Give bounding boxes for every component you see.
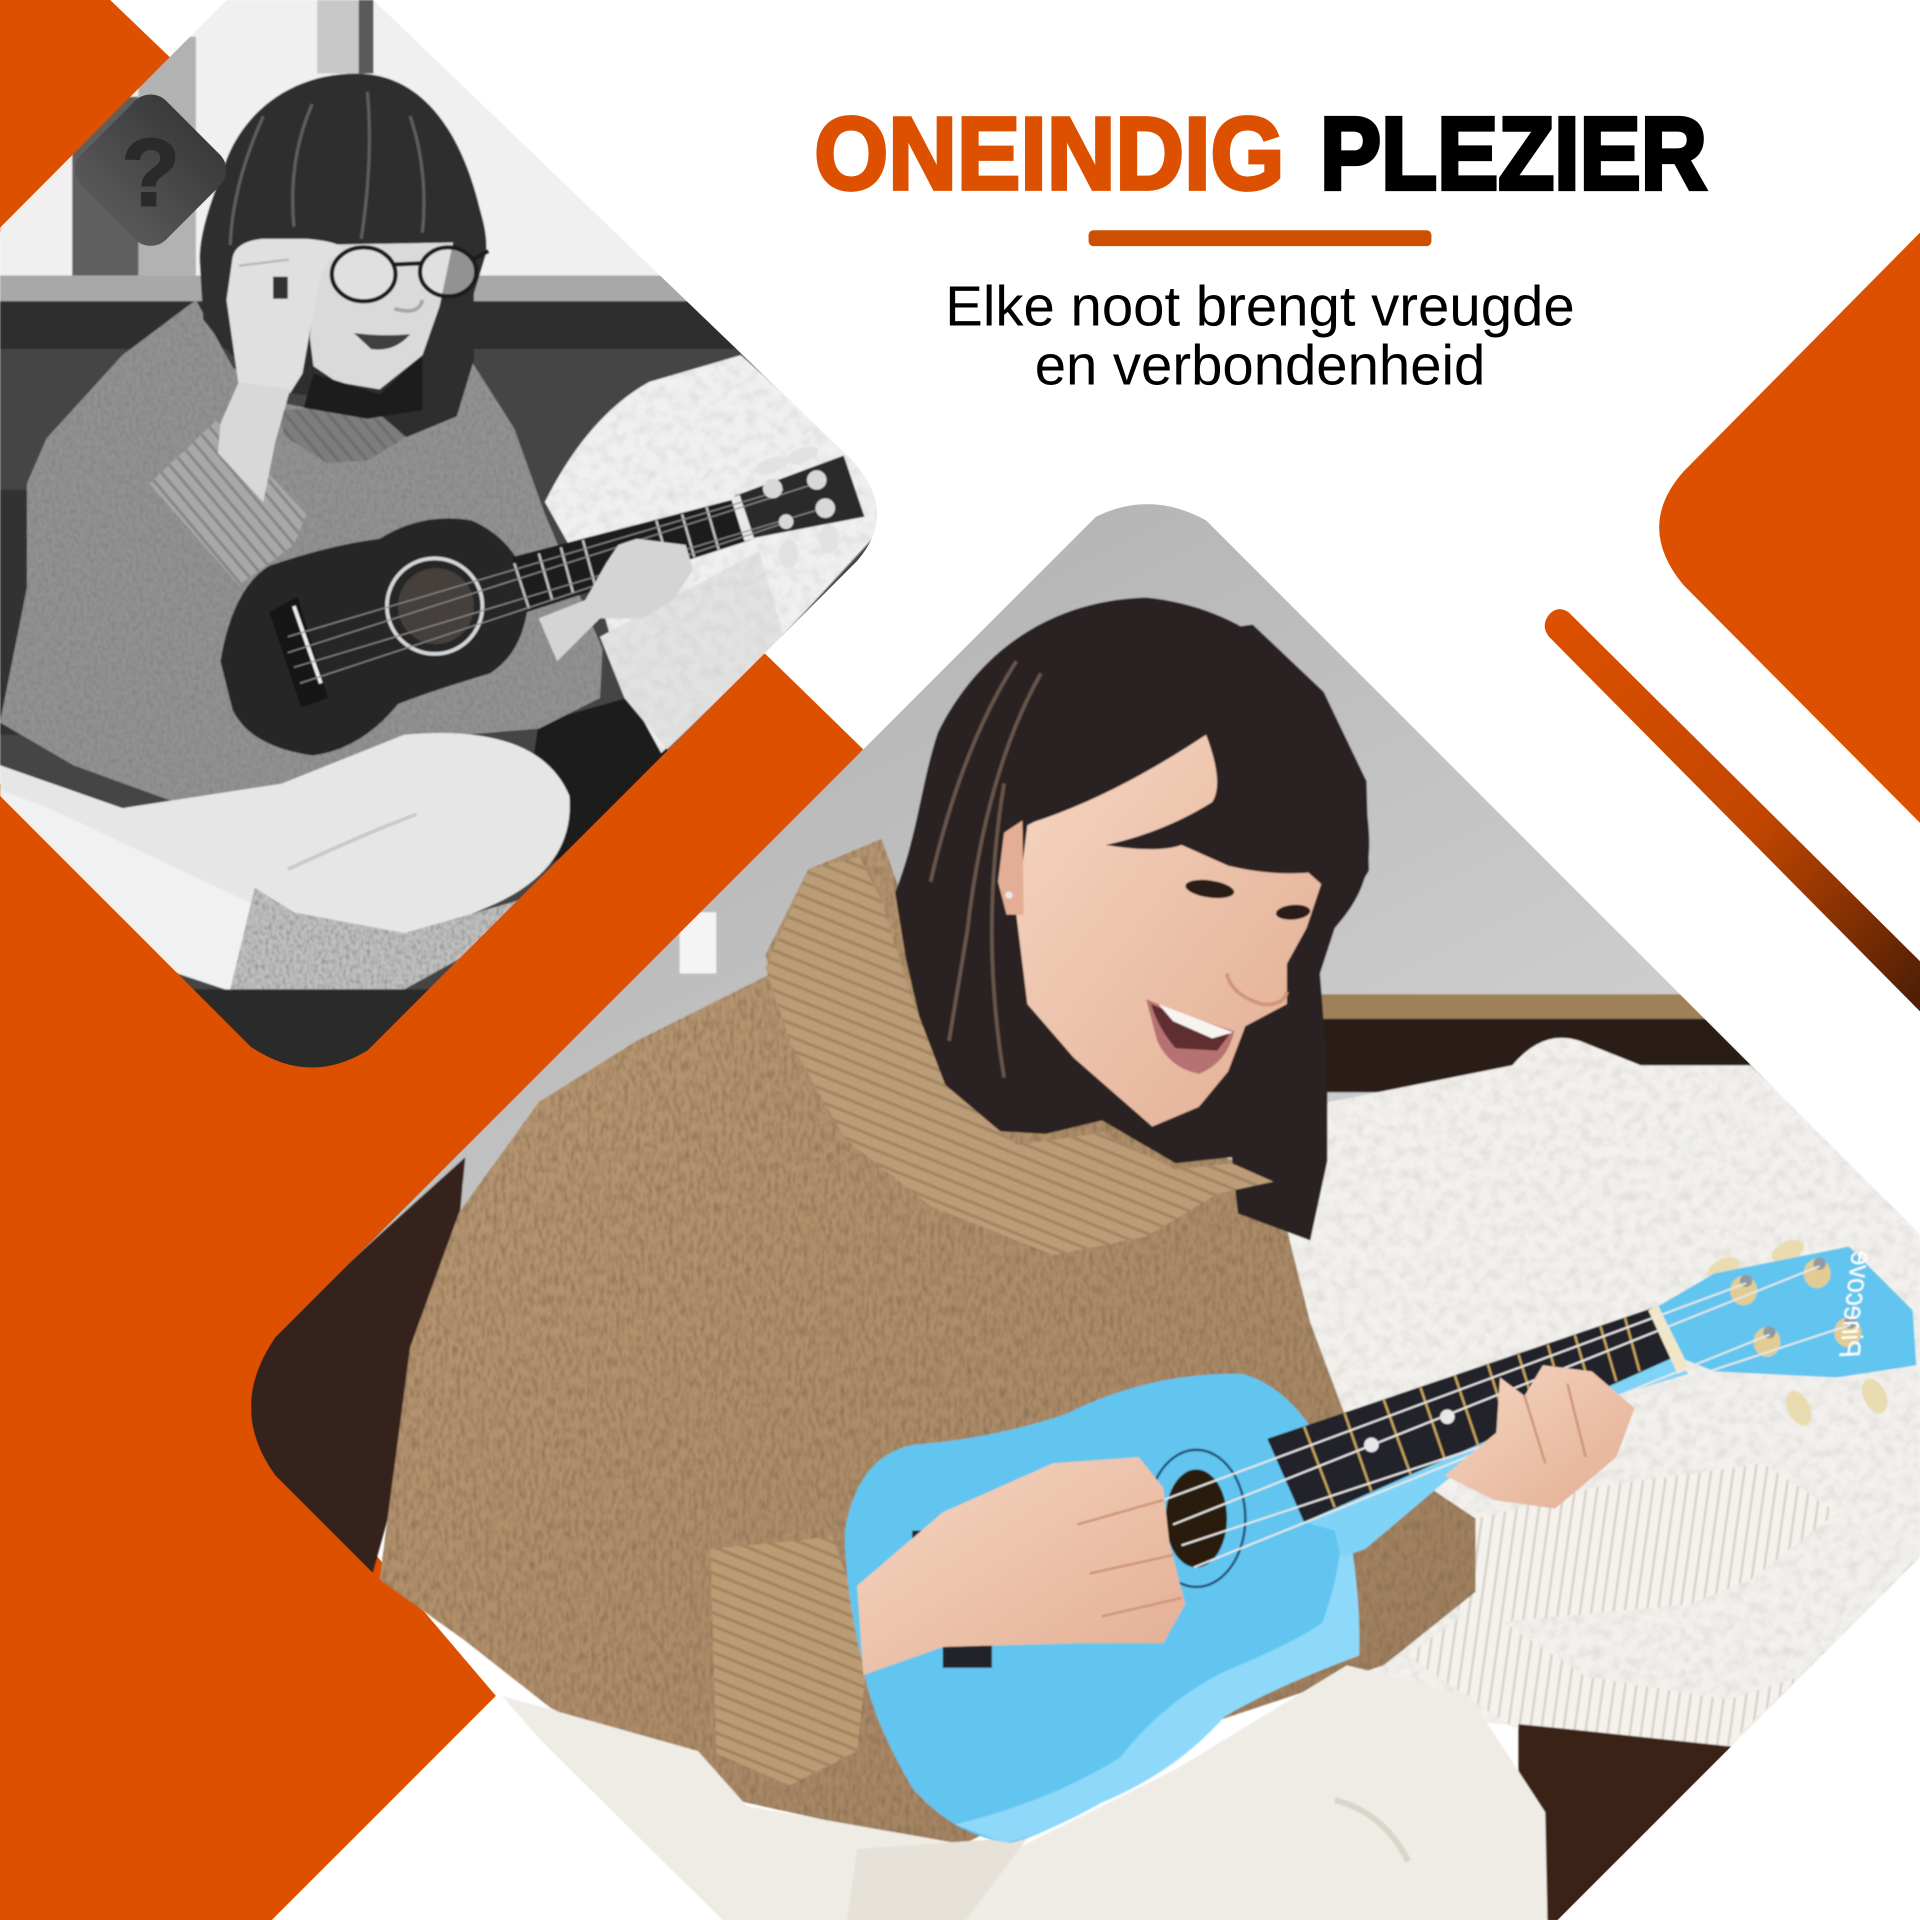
nose shadow bbox=[1227, 973, 1287, 1004]
brown seat bbox=[1518, 1724, 1751, 1920]
blanket fringe bbox=[600, 551, 784, 749]
window background bbox=[0, 0, 659, 276]
back hair bbox=[895, 598, 1369, 1240]
hair bbox=[200, 73, 486, 437]
title underline bbox=[1089, 230, 1431, 246]
sound hole bbox=[1166, 1469, 1227, 1567]
blanket bbox=[1273, 1038, 1920, 1749]
trousers bbox=[0, 732, 572, 934]
neck underside bbox=[1304, 1427, 1518, 1558]
orange corner shape: top left bbox=[0, 0, 171, 233]
blue ukulele bbox=[845, 1235, 1916, 1843]
photo: woman adjusting glasses with black ukulele (greyscale) bbox=[0, 0, 931, 1100]
subtitle: Elke noot brengt vreugde bbox=[945, 275, 1575, 338]
ear bbox=[998, 820, 1024, 915]
fretting hand bbox=[1445, 1365, 1635, 1509]
icon: question mark badge: ? bbox=[121, 121, 180, 227]
sweater cuff bbox=[149, 419, 306, 585]
bridge ends bbox=[912, 1531, 947, 1553]
sock bbox=[230, 888, 520, 989]
subtitle: en verbondenheid bbox=[1035, 333, 1485, 396]
orange rounded shape: right bbox=[1659, 233, 1920, 823]
earring bbox=[1005, 891, 1013, 899]
wrist bbox=[218, 382, 290, 502]
title bbox=[814, 96, 1707, 211]
headstock bbox=[1656, 1247, 1916, 1378]
title: PLEZIER bbox=[1320, 96, 1707, 211]
hair highlights bbox=[230, 92, 424, 245]
mouth bbox=[1146, 999, 1234, 1074]
under-chin shadow bbox=[304, 355, 422, 419]
photo: smiling woman with blue ukulele bbox=[208, 478, 1920, 1920]
sofa bbox=[0, 348, 872, 990]
headstock logo: Pinecove bbox=[1832, 1249, 1878, 1360]
wall background bbox=[220, 478, 1920, 1335]
sweater bbox=[380, 839, 1476, 1849]
blanket fringe lower bbox=[1407, 1605, 1800, 1746]
hand on glasses bbox=[227, 239, 340, 393]
hand on neck bbox=[539, 539, 693, 661]
icon: question mark badge bbox=[66, 85, 235, 255]
blanket bbox=[545, 355, 906, 753]
dark base bbox=[184, 989, 453, 1100]
large orange shape: lower left bbox=[0, 654, 863, 1920]
black ukulele bbox=[220, 443, 864, 756]
diagonal gradient bar: right bbox=[1545, 609, 1920, 1011]
shelf and dark band bbox=[1316, 994, 1720, 1019]
sweater collar bbox=[282, 408, 404, 463]
nose and mouth bbox=[354, 333, 410, 350]
face bbox=[1016, 735, 1321, 1127]
eyes bbox=[1184, 877, 1311, 921]
trousers bbox=[502, 1665, 1548, 1920]
tuning buttons bbox=[1704, 1235, 1892, 1429]
sweater cuff bbox=[710, 1537, 869, 1785]
sofa bbox=[208, 1157, 465, 1592]
title: ONEINDIG bbox=[814, 96, 1284, 211]
subtitle bbox=[945, 275, 1575, 396]
strumming hand bbox=[857, 1457, 1185, 1675]
face bbox=[310, 242, 453, 389]
fretboard bbox=[1267, 1308, 1675, 1522]
sweater bbox=[0, 300, 602, 814]
fringe bbox=[1031, 624, 1369, 928]
blanket fringe upper bbox=[1457, 1463, 1837, 1622]
turtleneck bbox=[765, 857, 1273, 1255]
hair highlights bbox=[931, 661, 1041, 1078]
glasses bbox=[332, 247, 489, 301]
